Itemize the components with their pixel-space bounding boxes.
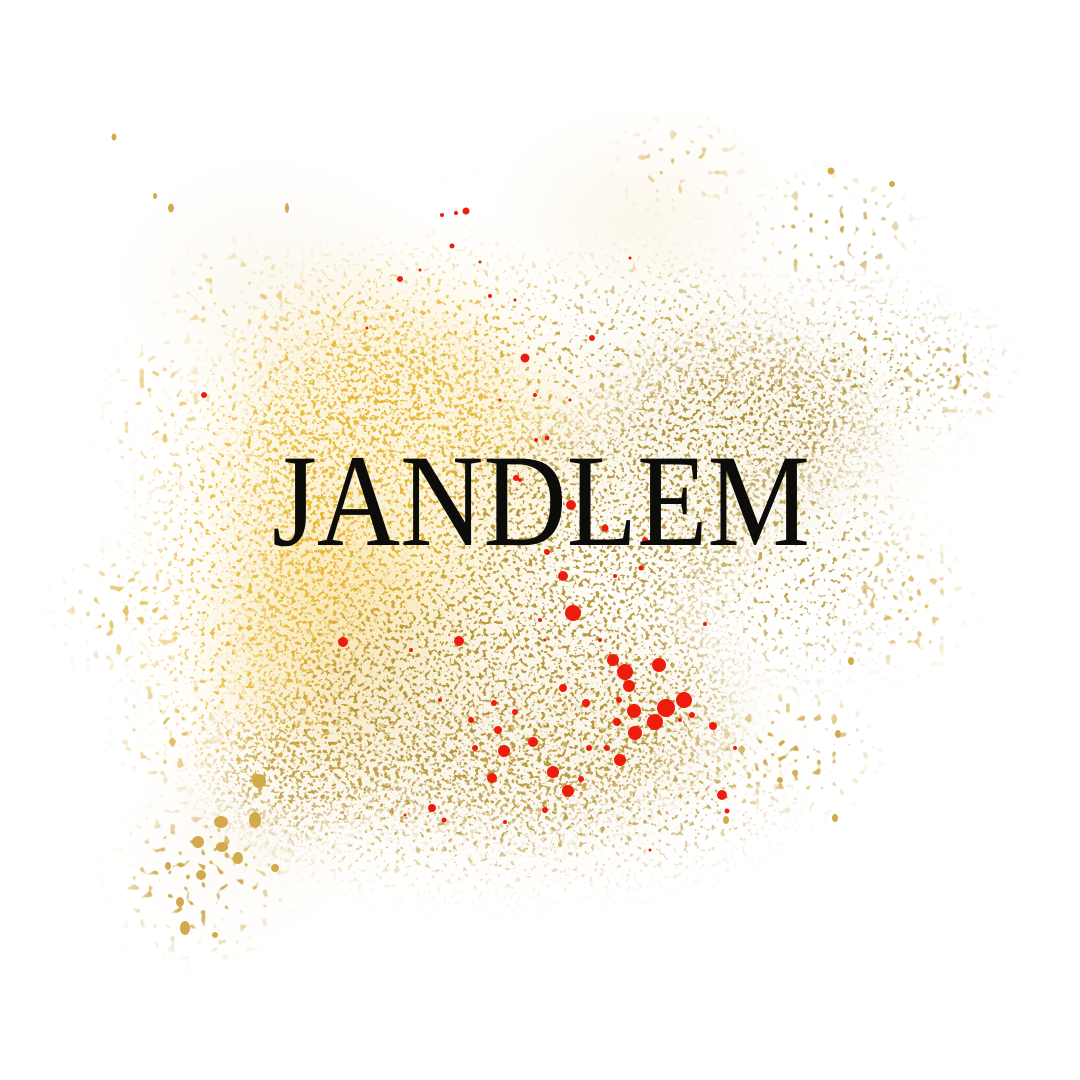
gold haze	[160, 170, 880, 890]
red splatter	[201, 208, 737, 852]
title: JANDLEM	[272, 427, 810, 574]
gold speckle, dense core	[220, 330, 860, 820]
gold speckle, wider spread	[160, 270, 960, 860]
large gold flecks	[112, 134, 895, 938]
gold speckle, outer scatter	[70, 135, 1000, 940]
